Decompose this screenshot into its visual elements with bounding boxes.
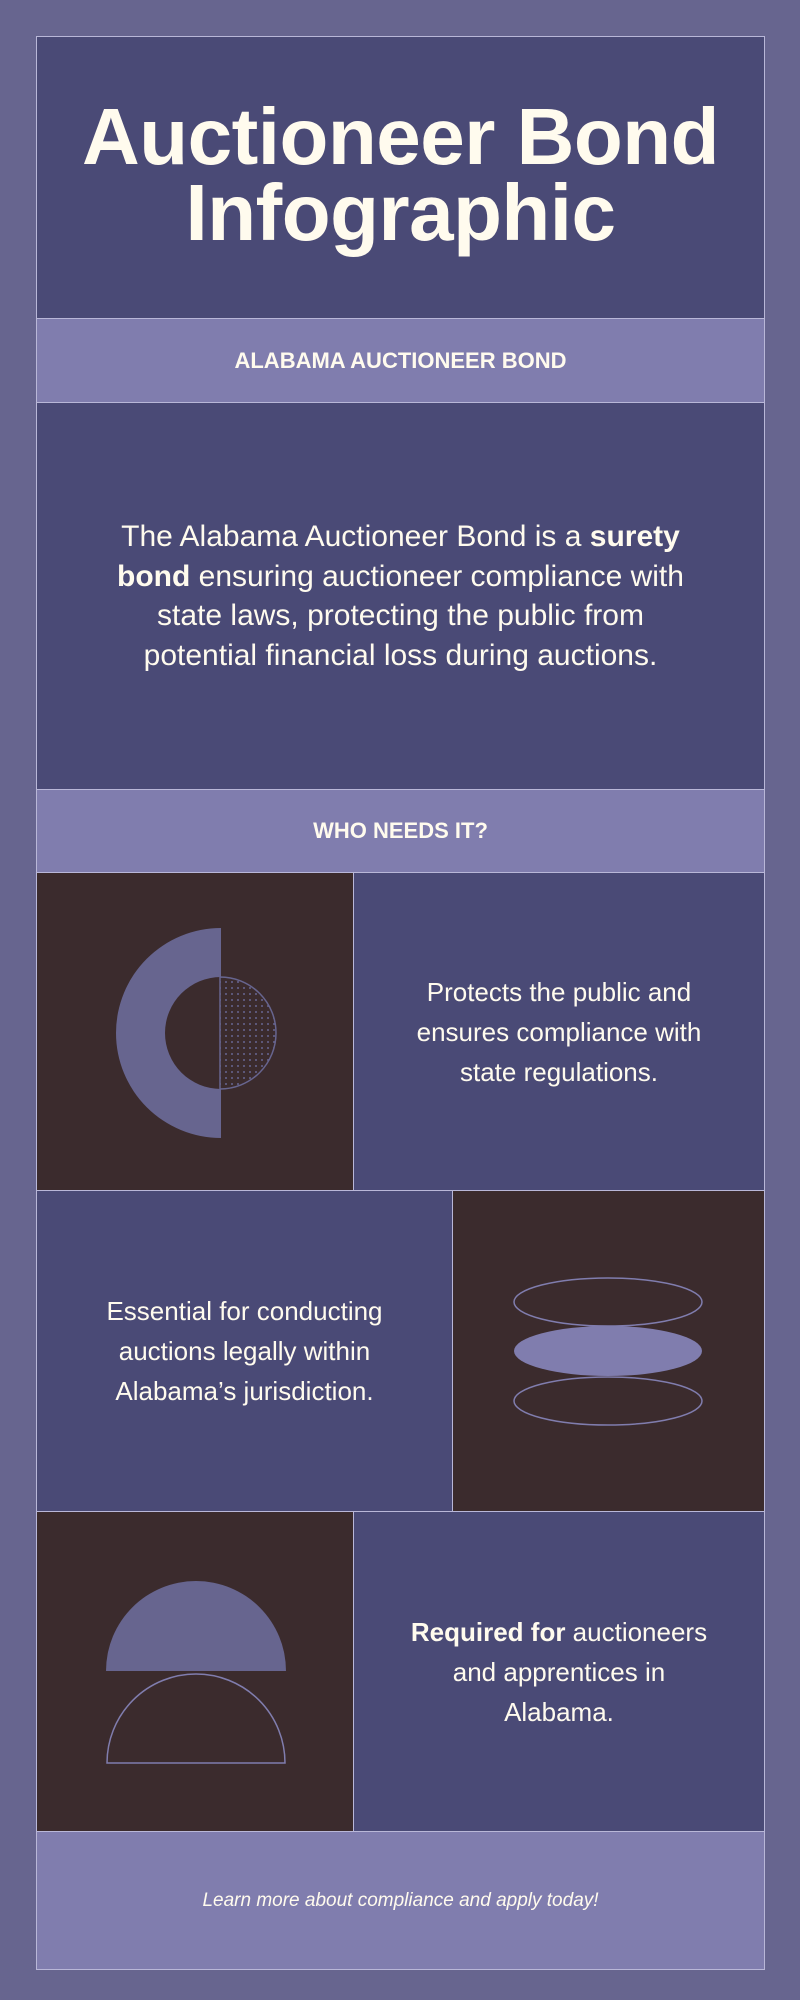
- panel: row2 text: auctions legally within: [119, 1336, 370, 1366]
- footer: [36, 1831, 765, 1970]
- panel: row3 text: and apprentices in: [453, 1656, 665, 1686]
- footer: Learn more about compliance and apply today!: [202, 1890, 599, 1910]
- description text: state laws, protecting the public from: [157, 599, 644, 632]
- panel: row1 text: ensures compliance with: [417, 1016, 701, 1046]
- title: [82, 92, 719, 257]
- panel: row2 text: Essential for conducting: [106, 1296, 383, 1326]
- icon: stacked ellipses: [513, 1277, 703, 1426]
- header bar: who needs it: [36, 789, 765, 873]
- title: Infographic: [185, 168, 616, 256]
- panel: row3 text: Alabama.: [504, 1696, 614, 1726]
- icon: half ring with dotted half circle: [116, 928, 277, 1138]
- description text: [117, 520, 684, 672]
- title panel: [36, 36, 765, 319]
- title: Auctioneer Bond: [82, 92, 719, 180]
- panel: row3 text: [353, 1511, 765, 1832]
- panel: row1 text: Protects the public and: [427, 976, 691, 1006]
- panel: row1 icon: [36, 872, 354, 1191]
- panel: row1 text: state regulations.: [460, 1056, 658, 1086]
- panel: row3 text: Required for auctioneers: [411, 1616, 707, 1646]
- panel: row3 icon: [36, 1511, 354, 1832]
- description text: bond ensuring auctioneer compliance with: [117, 560, 684, 592]
- header bar: alabama auctioneer bond: [36, 318, 765, 403]
- panel: row1 text: [353, 872, 765, 1191]
- panel: row2 text: [36, 1190, 453, 1512]
- description panel: [36, 402, 765, 790]
- header bar: who needs it: WHO NEEDS IT?: [313, 818, 488, 843]
- panel: row2 text: Alabama’s jurisdiction.: [115, 1376, 374, 1406]
- panel: row2 icon: [452, 1190, 765, 1512]
- description text: The Alabama Auctioneer Bond is a surety: [121, 520, 680, 553]
- icon: two half circles: [106, 1581, 286, 1764]
- description text: potential financial loss during auctions.: [144, 638, 657, 672]
- header bar: alabama auctioneer bond: ALABAMA AUCTIONEER BOND: [234, 348, 567, 372]
